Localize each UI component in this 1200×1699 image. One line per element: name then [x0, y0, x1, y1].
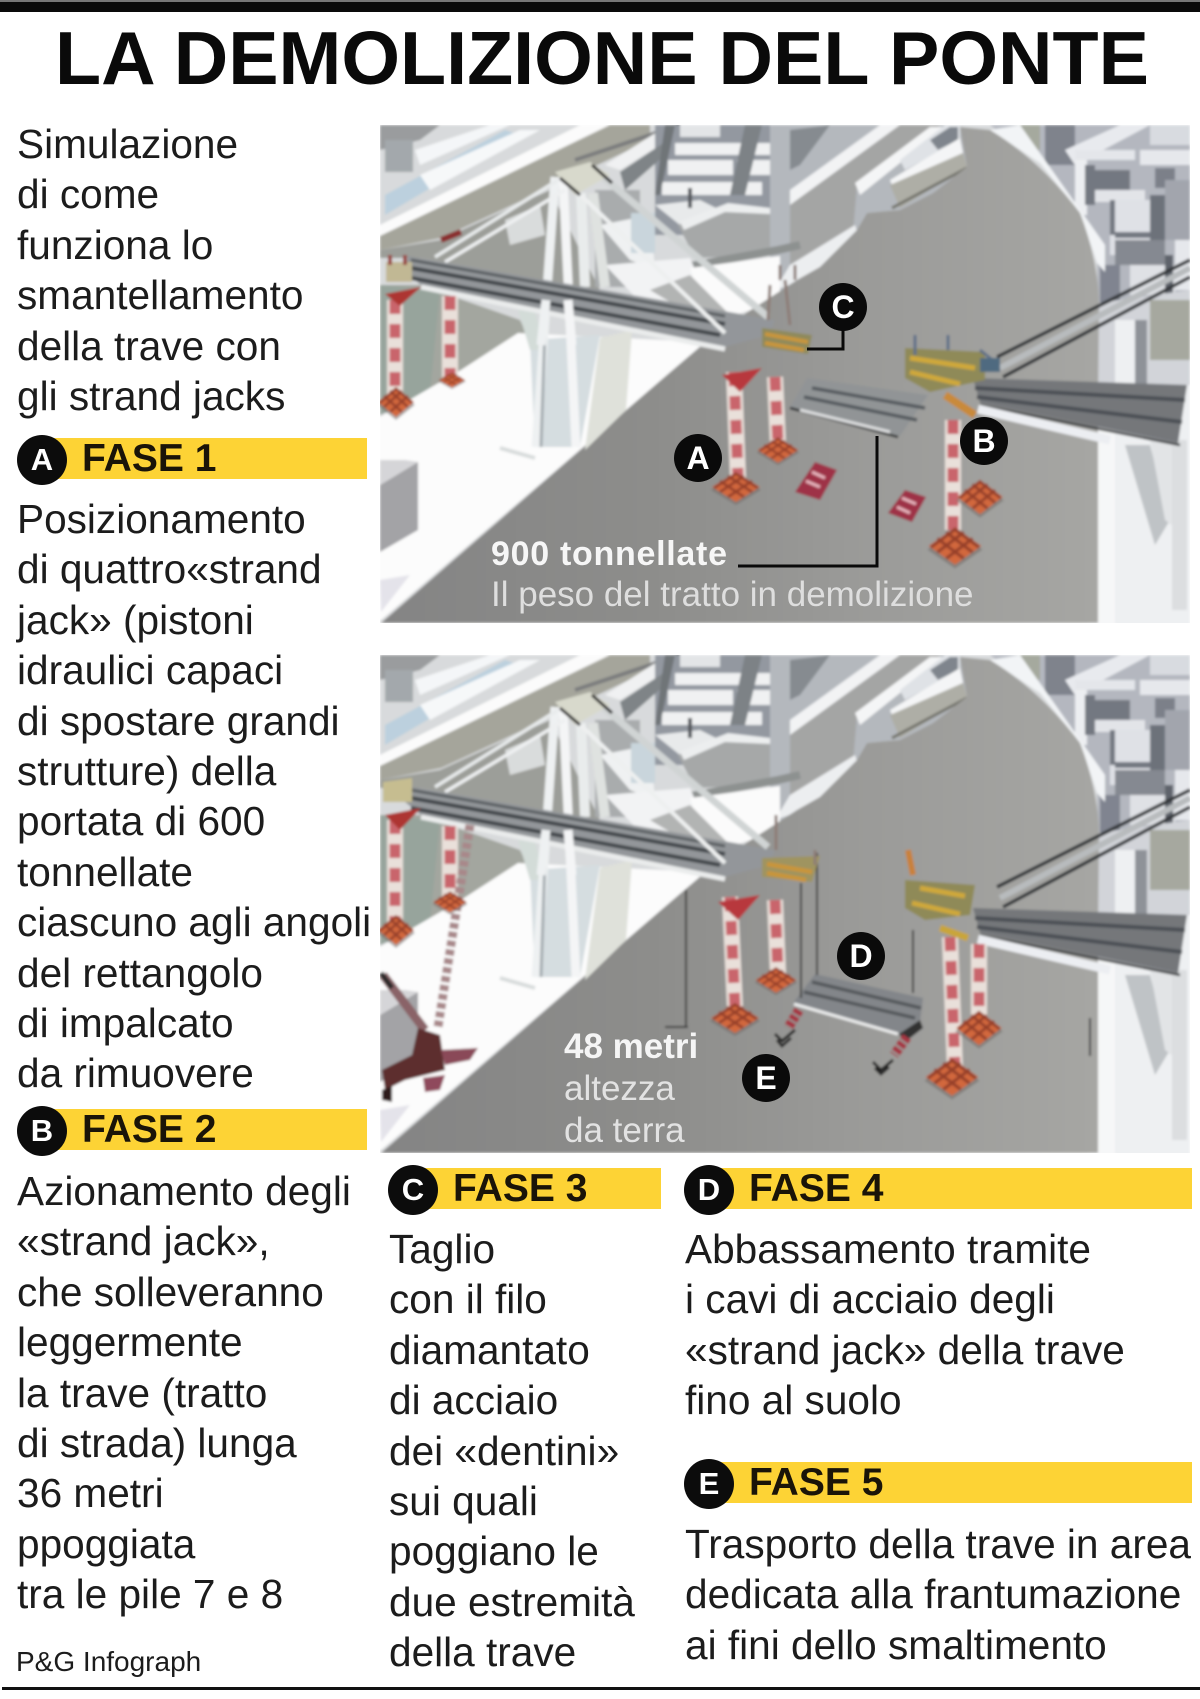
- text: fase 3: con il filo: [389, 1276, 547, 1322]
- text: fase 3: sui quali: [389, 1478, 538, 1524]
- intro text: [17, 121, 303, 419]
- transport units: [795, 462, 926, 522]
- marker B: [960, 417, 1008, 465]
- text: fase 5: dedicata alla frantumazione: [685, 1571, 1181, 1617]
- bottom rule: [2, 1687, 1200, 1690]
- text: fase 2: che solleveranno: [17, 1269, 324, 1315]
- text: fase 1: Posizionamento: [17, 496, 306, 542]
- text: fase 3: Taglio: [389, 1226, 495, 1272]
- text: fase 3: dei «dentini»: [389, 1428, 619, 1474]
- label: weight value: 900 tonnellate: [491, 535, 727, 573]
- heading: fase 1: A: [31, 442, 53, 477]
- crane: [381, 825, 478, 1102]
- heading: fase 2: B: [31, 1113, 53, 1148]
- intro text: della trave con: [17, 323, 281, 369]
- image: phase 2 scene: [377, 655, 1190, 1155]
- marker E: [742, 1054, 790, 1102]
- label: height: da terra: [564, 1111, 685, 1150]
- text: fase 3: due estremità: [389, 1579, 635, 1625]
- heading: fase 3: [388, 1165, 661, 1215]
- label: height: 48 metri: [564, 1027, 698, 1066]
- text: fase 2: ppoggiata: [17, 1521, 195, 1567]
- support towers: [385, 808, 979, 1069]
- text: fase 3: della trave: [389, 1629, 576, 1675]
- text: fase 4: [685, 1226, 1125, 1423]
- beam lowered to ground: [793, 974, 923, 1042]
- heading: fase 3: FASE 3: [453, 1167, 587, 1210]
- text: fase 1: da rimuovere: [17, 1050, 254, 1096]
- text: fase 1: di spostare grandi: [17, 698, 340, 744]
- marker E: E: [755, 1060, 777, 1096]
- marker C: [819, 283, 867, 331]
- callout line: weight: [738, 436, 877, 566]
- transporters and movement arrows: [775, 1010, 907, 1074]
- text: fase 4: i cavi di acciaio degli: [685, 1276, 1055, 1322]
- heading: fase 1: [17, 435, 367, 485]
- heading: fase 4: FASE 4: [749, 1167, 883, 1210]
- text: fase 1: idraulici capaci: [17, 647, 283, 693]
- height and cable lines: [665, 853, 1090, 1056]
- intro text: funziona lo: [17, 222, 213, 268]
- text: fase 5: ai fini dello smaltimento: [685, 1622, 1107, 1668]
- heading: fase 1: FASE 1: [82, 437, 216, 480]
- text: fase 2: di strada) lunga: [17, 1420, 297, 1466]
- marker D: D: [849, 938, 873, 974]
- title: LA DEMOLIZIONE DEL PONTE: [55, 16, 1149, 100]
- label: height: altezza: [564, 1069, 675, 1108]
- text: fase 2: la trave (tratto: [17, 1370, 267, 1416]
- text: fase 3: poggiano le: [389, 1528, 599, 1574]
- tower base pads: [377, 892, 1003, 1100]
- beam segment being removed: [790, 378, 928, 437]
- text: fase 1: di quattro«strand: [17, 546, 322, 592]
- heading: fase 4: D: [698, 1172, 720, 1207]
- image: phase 1 scene: [377, 125, 1190, 625]
- top rule: [0, 0, 1200, 12]
- text: fase 2: «strand jack»,: [17, 1218, 270, 1264]
- marker A: A: [686, 440, 710, 476]
- heading: fase 2: FASE 2: [82, 1108, 216, 1151]
- intro text: gli strand jacks: [17, 373, 285, 419]
- heading: fase 4: [684, 1165, 1192, 1215]
- red support towers: [385, 287, 953, 530]
- panel: simulation images: [380, 125, 1190, 1153]
- intro text: smantellamento: [17, 272, 303, 318]
- intro text: Simulazione: [17, 121, 238, 167]
- text: fase 4: «strand jack» della trave: [685, 1327, 1125, 1373]
- strand jack machinery: [386, 232, 1000, 415]
- marker D: [837, 932, 885, 980]
- text: fase 2: leggermente: [17, 1319, 243, 1365]
- text: fase 1: del rettangolo: [17, 950, 263, 996]
- text: fase 2: tra le pile 7 e 8: [17, 1571, 283, 1617]
- tower base pads: [377, 372, 1004, 568]
- text: fase 1: ciascuno agli angoli: [17, 899, 371, 945]
- heading: fase 5: E: [699, 1466, 719, 1501]
- text: fase 3: [389, 1226, 635, 1675]
- text: fase 1: di impalcato: [17, 1000, 234, 1046]
- credit: P&G Infograph: [16, 1646, 201, 1677]
- callout line: C: [807, 330, 843, 349]
- text: fase 3: di acciaio: [389, 1377, 558, 1423]
- text: fase 2: [17, 1168, 351, 1617]
- text: fase 5: Trasporto della trave in area: [685, 1521, 1191, 1567]
- text: fase 2: 36 metri: [17, 1470, 164, 1516]
- label: weight caption: Il peso del tratto in demolizione: [491, 575, 974, 614]
- text: fase 5: [685, 1521, 1191, 1668]
- heading: fase 3: C: [402, 1172, 424, 1207]
- text: fase 1: [16, 496, 371, 1096]
- text: fase 1: tonnellate: [17, 849, 193, 895]
- heading: fase 2: [17, 1106, 367, 1156]
- strand jack machinery: [383, 778, 975, 938]
- text: fase 1: jack» (pistoni: [17, 597, 254, 643]
- text: fase 4: fino al suolo: [685, 1377, 902, 1423]
- marker C: C: [831, 289, 855, 325]
- text: fase 2: Azionamento degli: [17, 1168, 351, 1214]
- intro text: di come: [17, 171, 159, 217]
- text: fase 4: Abbassamento tramite: [685, 1226, 1091, 1272]
- heading: fase 5: [684, 1459, 1192, 1509]
- heading: fase 5: FASE 5: [749, 1461, 883, 1504]
- text: fase 3: diamantato: [389, 1327, 590, 1373]
- label: height: [564, 1027, 698, 1150]
- marker B: B: [972, 423, 996, 459]
- marker A: [674, 434, 722, 482]
- text: fase 1: strutture) della: [17, 748, 276, 794]
- text: fase 1: portata di 600: [17, 798, 265, 844]
